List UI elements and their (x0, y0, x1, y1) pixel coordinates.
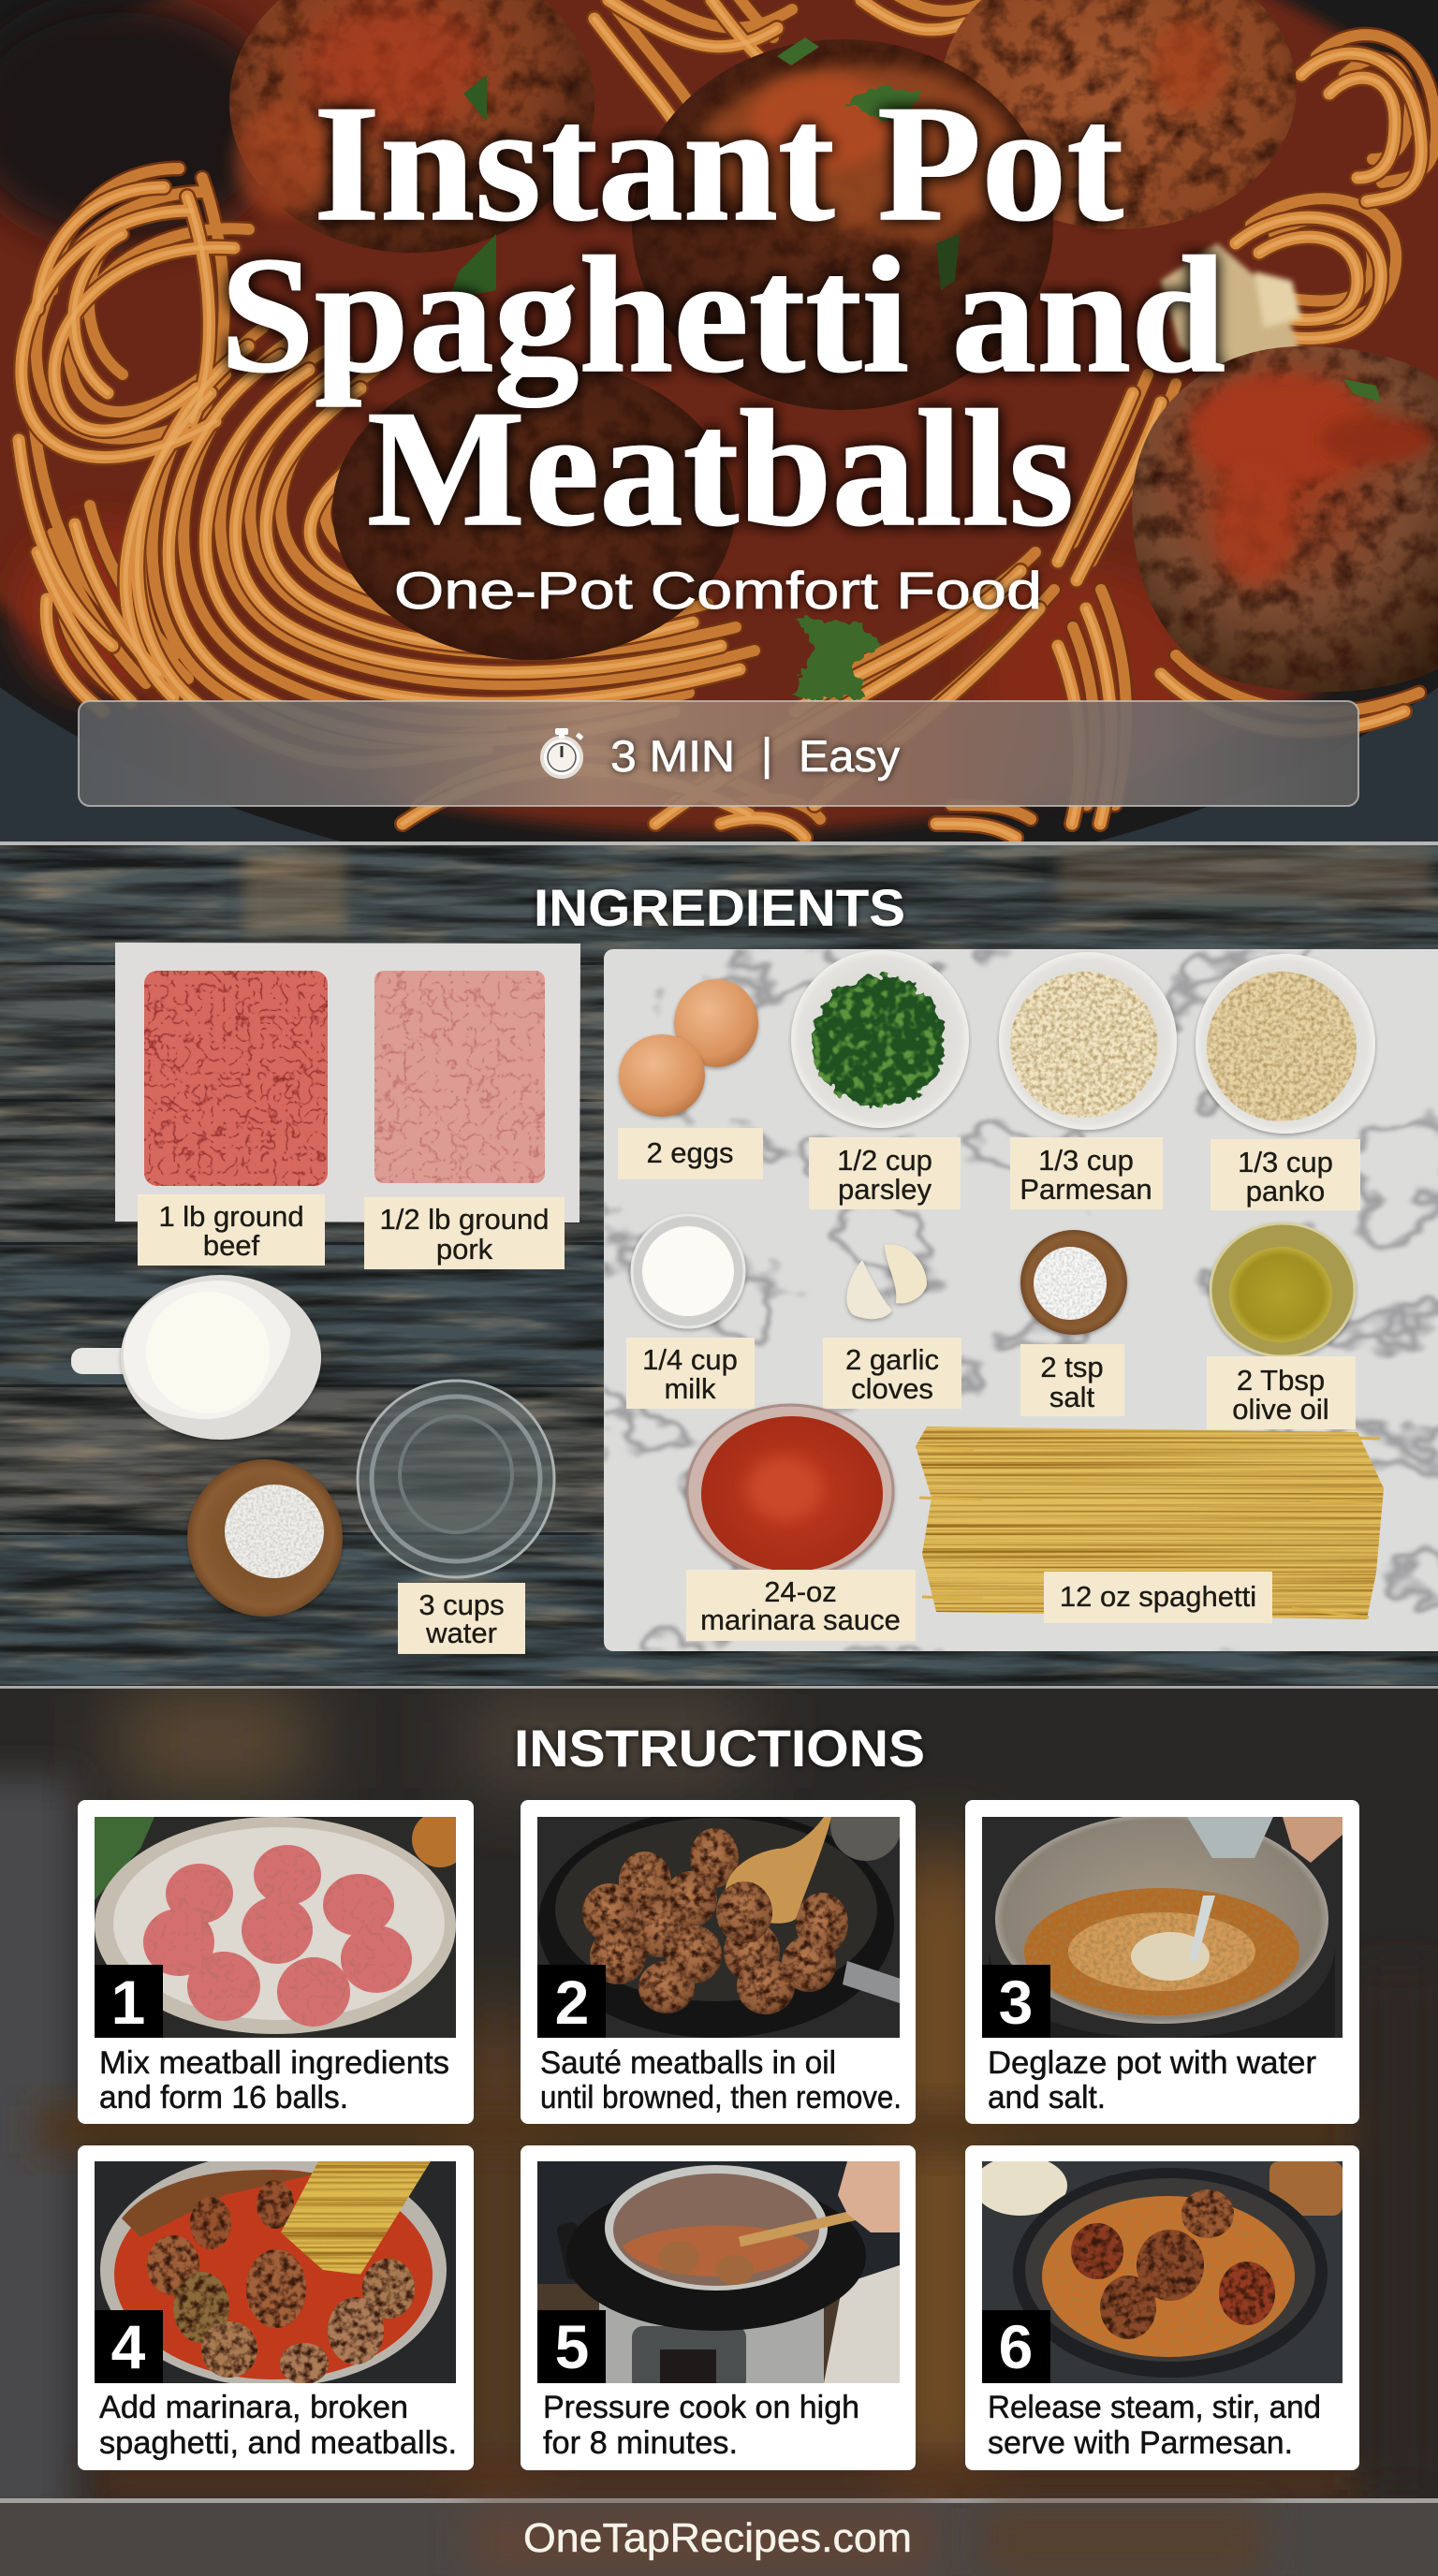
eggs (619, 979, 758, 1117)
label: olive oil: 2 Tbsp (1237, 1364, 1325, 1397)
badge text: | (761, 729, 772, 779)
step 5 caption: Pressure cook on high (543, 2390, 859, 2425)
step 5 caption: for 8 minutes. (543, 2425, 738, 2461)
step 4 caption: spaghetti, and meatballs. (99, 2425, 457, 2461)
panko bowl (1196, 954, 1375, 1134)
instructions panel (0, 1689, 1438, 2576)
salt dish (1020, 1230, 1127, 1335)
badge text: 3 MIN (610, 731, 735, 781)
meatball top left (229, 0, 594, 253)
label: beef (138, 1194, 325, 1266)
step number 5: 5 (555, 2312, 589, 2381)
label: salt: salt (1049, 1381, 1095, 1413)
label: milk (626, 1338, 755, 1409)
label: pork (364, 1197, 565, 1269)
step 2 image: browning meatballs in pan (537, 1790, 903, 2038)
step 4 image: pot with marinara and spaghetti (95, 2153, 456, 2387)
wood background (0, 845, 1438, 1690)
step 2 caption: Sauté meatballs in oil (540, 2045, 836, 2081)
salt in wooden bowl (187, 1459, 343, 1617)
label: spaghetti: 12 oz spaghetti (1060, 1580, 1256, 1613)
marble board (604, 949, 1438, 1651)
label: beef: beef (203, 1229, 260, 1262)
instructions heading: INSTRUCTIONS (514, 1719, 925, 1778)
time and difficulty badge (79, 701, 1358, 806)
label: olive oil: olive oil (1232, 1393, 1329, 1426)
step card 3 (965, 1800, 1359, 2124)
label: salt: 2 tsp (1040, 1351, 1104, 1383)
step card 4 (78, 2145, 474, 2470)
step 3 image: deglazing pot (982, 1814, 1343, 2038)
icon: stopwatch (542, 728, 583, 777)
label: garlic: 2 garlic (845, 1343, 939, 1376)
marinara bowl (687, 1405, 893, 1577)
label: garlic (823, 1338, 961, 1409)
title: Meatballs (367, 375, 1074, 561)
olive oil dish (1211, 1223, 1355, 1356)
milk dish (632, 1215, 744, 1327)
label: spaghetti (1044, 1572, 1272, 1623)
parmesan bowl (999, 952, 1177, 1130)
step 1 caption (99, 2045, 449, 2115)
step 6 caption (988, 2390, 1321, 2461)
label: beef: 1 lb ground (158, 1200, 304, 1233)
parmesan shreds (1161, 243, 1301, 384)
dry spaghetti bundle (916, 1427, 1384, 1619)
step 3 caption: and salt. (988, 2080, 1106, 2115)
meatball top centre (632, 39, 1053, 410)
parchment paper (115, 943, 580, 1222)
meatball right (1132, 346, 1438, 692)
water glass (358, 1381, 554, 1577)
step 4 caption: Add marinara, broken (99, 2390, 408, 2425)
label: parsley: parsley (838, 1173, 932, 1206)
label: marinara (686, 1570, 916, 1641)
step 6 caption: serve with Parmesan. (988, 2425, 1293, 2461)
step 6 image: served bowl (974, 2156, 1343, 2383)
ingredients heading: INGREDIENTS (534, 878, 905, 937)
label: parsley: 1/2 cup (837, 1144, 932, 1177)
step number 2 (537, 1965, 606, 2038)
label: eggs: 2 eggs (646, 1136, 734, 1169)
milk jug (71, 1275, 321, 1440)
step number 1 (95, 1965, 163, 2038)
step number 6 (982, 2310, 1050, 2383)
subtitle: One-Pot Comfort Food (394, 561, 1042, 620)
parsley garnish (449, 37, 1381, 697)
label: milk: 1/4 cup (642, 1343, 738, 1376)
badge text: Easy (799, 731, 901, 781)
label: pork: 1/2 lb ground (380, 1203, 549, 1236)
label: marinara: marinara sauce (700, 1603, 901, 1636)
spaghetti strands (19, 0, 1436, 838)
label: parmesan: 1/3 cup (1038, 1144, 1134, 1177)
label: salt (1020, 1344, 1124, 1416)
step 5 caption (543, 2390, 859, 2461)
label: garlic: cloves (851, 1372, 933, 1405)
label: water: 3 cups (418, 1588, 505, 1621)
step number 3: 3 (999, 1968, 1033, 2037)
step 4 caption (99, 2390, 457, 2461)
label: water (398, 1583, 525, 1654)
step 6 caption: Release steam, stir, and (988, 2390, 1321, 2425)
step card 5 (521, 2145, 916, 2470)
step number 3 (982, 1965, 1050, 2038)
step 1 image: raw meatballs on plate (95, 1811, 468, 2038)
hero panel (0, 0, 1438, 889)
step 2 caption: until browned, then remove. (540, 2080, 902, 2115)
label: panko (1211, 1139, 1360, 1210)
step card 2 (521, 1790, 916, 2124)
step 5 image: instant pot (537, 2161, 900, 2392)
ground beef (144, 971, 328, 1186)
title (220, 70, 1225, 561)
step 1 caption: Mix meatball ingredients (99, 2045, 449, 2081)
step number 4: 4 (111, 2312, 146, 2381)
blurred kitchen background (0, 1689, 1438, 2576)
label: olive oil (1207, 1356, 1356, 1429)
step card 1 (78, 1800, 474, 2124)
label: water: water (425, 1617, 497, 1649)
badge text (610, 729, 901, 781)
label: panko: panko (1246, 1175, 1325, 1208)
step number 2: 2 (555, 1968, 589, 2037)
step 1 caption: and form 16 balls. (99, 2080, 348, 2115)
label: parmesan: Parmesan (1020, 1173, 1152, 1206)
label: parmesan (1010, 1137, 1163, 1209)
title: Spaghetti and (220, 222, 1225, 407)
meatball lower centre (332, 360, 735, 660)
step number 4 (95, 2310, 163, 2383)
title: Instant Pot (314, 70, 1123, 256)
step 3 caption: Deglaze pot with water (988, 2045, 1316, 2081)
step number 5 (537, 2310, 606, 2383)
label: panko: 1/3 cup (1238, 1146, 1333, 1178)
ingredients panel (0, 845, 1438, 1690)
label: parsley (809, 1137, 961, 1209)
meatball top right (941, 0, 1297, 229)
step 3 caption (988, 2045, 1316, 2115)
label: eggs (618, 1128, 763, 1179)
footer band (0, 2498, 1438, 2576)
ground pork (374, 971, 545, 1183)
label: pork: pork (436, 1233, 493, 1266)
parsley bowl (791, 950, 969, 1128)
step 2 caption (540, 2045, 902, 2115)
step number 1: 1 (111, 1968, 145, 2037)
step card 6 (965, 2145, 1359, 2470)
label: milk: milk (664, 1372, 716, 1405)
label: marinara: 24-oz (764, 1575, 837, 1608)
footer website: OneTapRecipes.com (523, 2515, 912, 2561)
garlic cloves (846, 1245, 927, 1319)
step number 6: 6 (999, 2312, 1033, 2381)
